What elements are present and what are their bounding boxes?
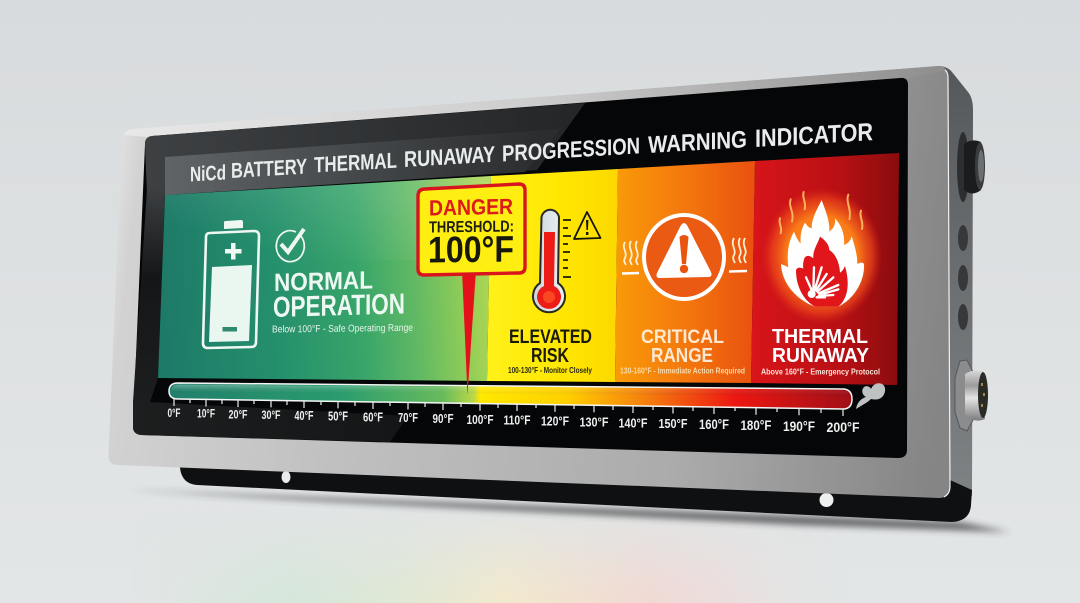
device body xyxy=(180,66,973,522)
gauge scale labels: 100°F xyxy=(466,413,494,427)
icon: smoke puff xyxy=(856,383,885,409)
danger pointer xyxy=(462,270,476,395)
caption: thermal runaway: Above 160°F - Emergency Protocol xyxy=(761,366,880,376)
gauge scale labels: 40°F xyxy=(294,409,314,423)
heading: normal operation: OPERATION xyxy=(273,288,405,324)
explosion burst xyxy=(806,267,838,297)
gauge scale labels: 200°F xyxy=(826,420,860,435)
gauge ticks xyxy=(174,399,843,416)
icon: warning circle xyxy=(644,215,724,299)
gauge scale labels: 90°F xyxy=(432,412,454,426)
gauge scale labels: 160°F xyxy=(699,417,729,432)
heading: thermal runaway: RUNAWAY xyxy=(772,344,869,367)
gauge scale labels: 140°F xyxy=(618,415,648,430)
callout: danger threshold: DANGER xyxy=(429,194,513,220)
icon: thermometer xyxy=(533,210,571,312)
heading: elevated risk xyxy=(509,327,592,367)
gauge scale labels: 60°F xyxy=(363,410,383,424)
title: RUNAWAY xyxy=(404,142,495,172)
title: THERMAL xyxy=(314,148,397,177)
mounting hole right xyxy=(820,493,834,507)
gauge scale labels: 0°F xyxy=(168,406,180,420)
heading: critical range xyxy=(641,326,724,367)
panel: normal operation xyxy=(158,176,491,381)
callout: danger threshold: THRESHOLD: xyxy=(429,218,514,236)
side wall xyxy=(940,66,973,496)
mounting hole left xyxy=(282,471,290,483)
title: NiCd xyxy=(190,161,226,186)
gauge scale labels: 130°F xyxy=(580,414,609,429)
gauge scale labels: 10°F xyxy=(197,407,215,421)
icon: check mark xyxy=(276,229,304,262)
panel: elevated risk xyxy=(487,169,618,382)
panel: thermal runaway xyxy=(751,153,899,385)
caption: elevated risk: 100-130°F - Monitor Closely xyxy=(508,365,592,375)
screen glare top xyxy=(145,103,585,195)
icon: battery xyxy=(203,220,259,348)
title strip xyxy=(165,129,560,195)
heading: thermal runaway xyxy=(772,326,869,367)
steel frame xyxy=(108,66,950,498)
gauge scale labels: 150°F xyxy=(658,416,688,431)
title xyxy=(190,118,873,186)
callout: danger threshold: 100°F xyxy=(428,228,514,270)
icon: heat waves left xyxy=(622,241,639,274)
gauge scale labels: 120°F xyxy=(541,414,569,428)
caption: critical range: 130-160°F - Immediate Action Required xyxy=(620,366,745,376)
heading: critical range: RANGE xyxy=(651,345,713,367)
gauge scale labels xyxy=(168,406,860,435)
heading: critical range: CRITICAL xyxy=(641,326,724,348)
control buttons xyxy=(958,225,968,330)
caption: normal operation: Below 100°F - Safe Operating Range xyxy=(272,323,413,335)
flame glow xyxy=(762,188,882,324)
heading: elevated risk: ELEVATED xyxy=(509,327,592,348)
heading: elevated risk: RISK xyxy=(531,345,569,367)
connector: round socket xyxy=(957,132,985,202)
screen xyxy=(133,78,908,458)
gauge scale labels: 30°F xyxy=(262,408,280,422)
heading: normal operation: NORMAL xyxy=(274,266,373,297)
gauge scale labels: 20°F xyxy=(228,408,248,422)
panel: critical range xyxy=(615,161,755,383)
callout: danger threshold xyxy=(418,184,525,275)
lower glare xyxy=(133,402,408,442)
title: INDICATOR xyxy=(755,118,873,153)
title: WARNING xyxy=(648,126,747,159)
left bezel strip xyxy=(133,190,165,402)
floor colour reflection xyxy=(214,540,741,603)
title: BATTERY xyxy=(231,155,307,183)
title: PROGRESSION xyxy=(502,132,640,166)
gauge scale labels: 70°F xyxy=(398,411,418,425)
gauge scale labels: 190°F xyxy=(783,419,815,434)
heading: normal operation xyxy=(273,266,405,324)
gauge scale labels: 180°F xyxy=(740,418,772,433)
heading: thermal runaway: THERMAL xyxy=(772,326,868,348)
base plate xyxy=(180,460,972,522)
temperature gauge bar xyxy=(169,383,852,409)
icon: warning triangle xyxy=(574,212,600,239)
icon: flame xyxy=(779,192,864,307)
gauge scale labels: 50°F xyxy=(328,410,348,424)
shadow under device xyxy=(128,490,1010,532)
connector: metal plug xyxy=(955,360,988,431)
gauge scale labels: 110°F xyxy=(504,414,531,428)
icon: heat waves right xyxy=(729,238,747,272)
rising embers xyxy=(779,192,862,233)
